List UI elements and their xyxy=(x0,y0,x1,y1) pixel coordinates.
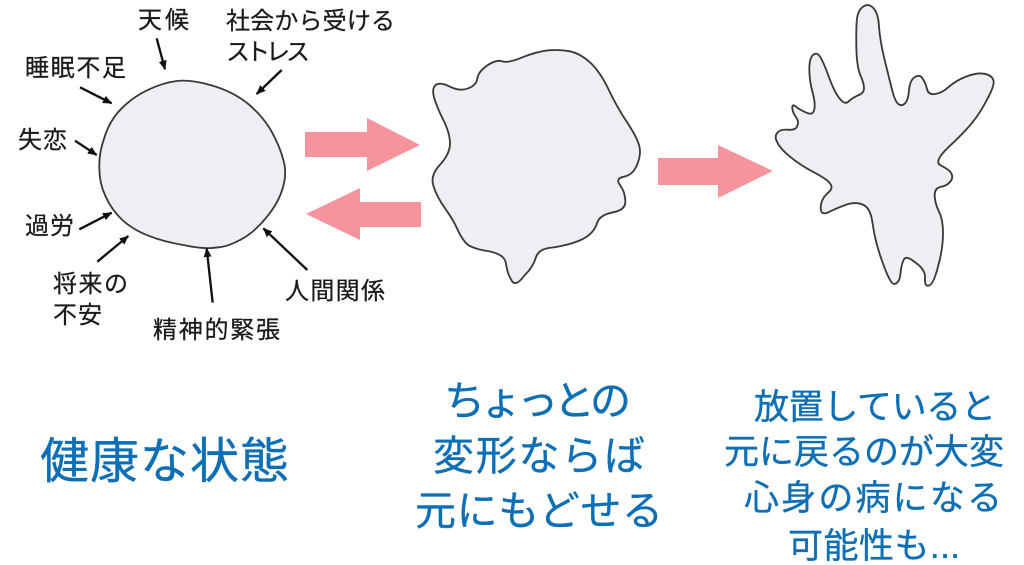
stressor labels: 天候 xyxy=(138,7,189,34)
arrow: further deformation xyxy=(658,145,773,198)
stressor labels: 不安 xyxy=(53,302,102,329)
caption: if neglected: 可能性も... xyxy=(788,527,960,565)
arrow: recovers left xyxy=(306,188,421,240)
caption: small deformation can recover xyxy=(415,378,663,534)
stressor labels: 失恋 xyxy=(18,127,67,154)
caption: small deformation can recover: 元にもどせる xyxy=(415,488,663,534)
stressor labels: 睡眠不足 xyxy=(25,55,126,82)
caption: small deformation can recover: 変形ならば xyxy=(433,433,645,479)
stressor labels xyxy=(18,7,395,344)
stressor labels: 精神的緊張 xyxy=(153,317,280,344)
caption: if neglected: 心身の病になる xyxy=(744,479,1002,518)
caption: if neglected: 放置していると xyxy=(754,388,996,427)
stressor labels: 過労 xyxy=(25,213,74,240)
caption: small deformation can recover: ちょっとの xyxy=(444,378,631,424)
arrow: stress deforms right xyxy=(305,118,420,171)
caption: if neglected: 元に戻るのが大変 xyxy=(724,433,1004,472)
stressor labels: 人間関係 xyxy=(285,278,385,305)
stressor arrows xyxy=(75,38,307,303)
stressor labels: 社会から受ける xyxy=(226,8,395,35)
stressor labels: ストレス xyxy=(226,39,310,66)
caption: healthy state: 健康な状態 xyxy=(40,435,289,489)
caption: if neglected xyxy=(724,388,1004,565)
heavily deformed shape xyxy=(776,5,994,286)
healthy round shape xyxy=(99,81,285,248)
stressor labels: 将来の xyxy=(53,271,128,298)
slightly deformed shape xyxy=(433,50,640,283)
